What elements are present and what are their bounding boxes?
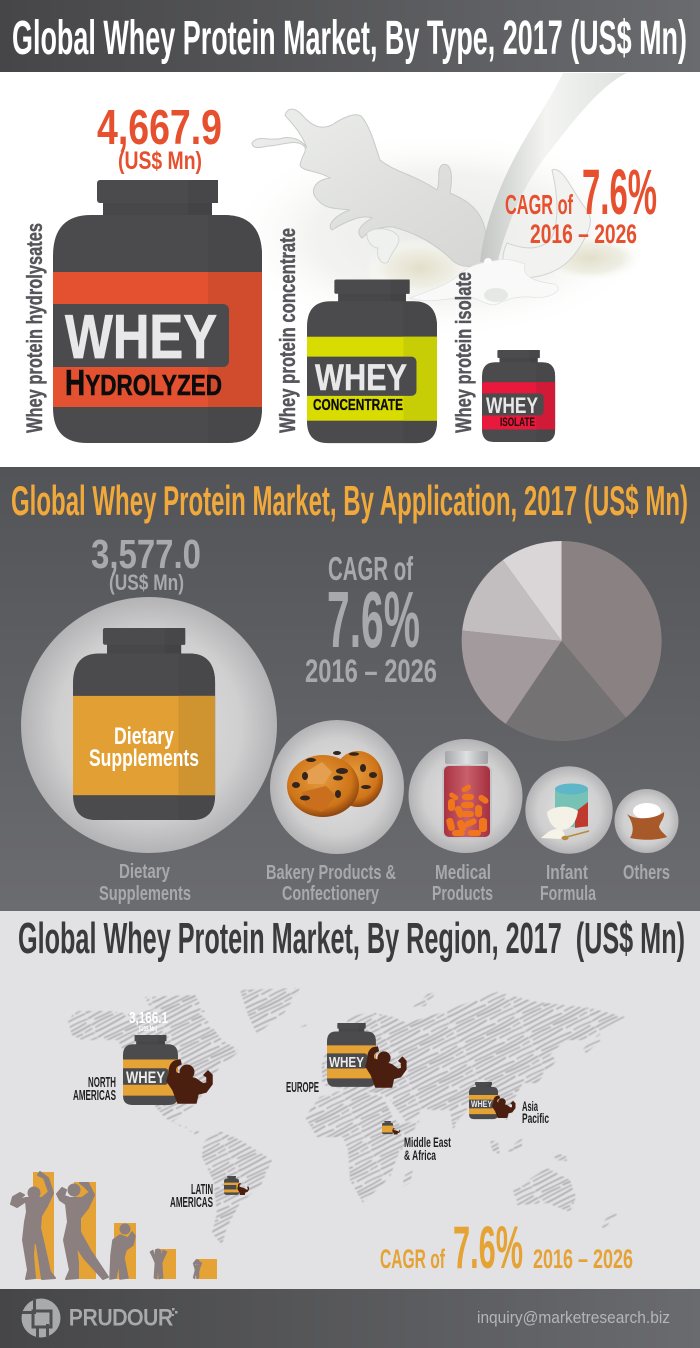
label: medical: Medical xyxy=(435,862,491,884)
panel: region section xyxy=(0,911,700,1289)
label: north americas: NORTH xyxy=(88,1074,116,1091)
callout: CAGR application: 7.6% xyxy=(327,575,420,664)
label: bakery xyxy=(266,862,396,905)
label: dietary supplements xyxy=(99,861,191,905)
value: north america: 3,166.1 xyxy=(129,1010,168,1027)
jar: concentrate xyxy=(302,280,437,443)
jar: hydrolyzed xyxy=(45,180,262,443)
jar: hydrolyzed: HYDROLYZED xyxy=(65,362,222,403)
bubble: bakery cookies xyxy=(270,720,404,854)
figure: north america jar: WHEY xyxy=(126,1068,166,1087)
callout: CAGR region: 7.6% xyxy=(453,1214,523,1281)
callout: CAGR type xyxy=(505,156,657,249)
bar chart with bodybuilders xyxy=(11,1172,217,1279)
label: middle east africa: & Africa xyxy=(404,1147,436,1163)
callout: CAGR region xyxy=(380,1214,633,1281)
callout: CAGR application xyxy=(305,550,437,689)
label: latin americas xyxy=(170,1181,213,1211)
jar: hydrolyzed: WHEY xyxy=(65,303,217,372)
vertical label: hydrolysates: Whey protein hydrolysates xyxy=(22,223,47,433)
jar: concentrate: CONCENTRATE xyxy=(313,397,403,414)
figure: middle east jar xyxy=(382,1121,400,1134)
callout: CAGR application: 2016 – 2026 xyxy=(305,653,437,689)
callout: CAGR type: CAGR of xyxy=(505,189,573,220)
label: asia pacific: Asia xyxy=(522,1098,538,1114)
figure: latin america jar xyxy=(223,1176,249,1195)
world map xyxy=(68,988,625,1245)
label: infant formula: Formula xyxy=(540,883,597,905)
callout: CAGR type: 2016 – 2026 xyxy=(530,219,637,249)
logo wordmark: PRUDOUR xyxy=(69,1305,173,1330)
value: application: 3,577.0 xyxy=(91,531,201,577)
bubble: medical jar xyxy=(408,739,522,853)
figure: asia pacific jar xyxy=(468,1082,515,1119)
jar: isolate: WHEY xyxy=(486,393,538,418)
vertical label: concentrate: Whey protein concentrate xyxy=(275,228,300,433)
figure: asia pacific jar: WHEY xyxy=(471,1099,492,1109)
callout: CAGR region: 2016 – 2026 xyxy=(533,1244,633,1274)
bubble: dietary supplements jar xyxy=(21,597,277,853)
value: type xyxy=(97,101,222,175)
footer bar xyxy=(0,1289,700,1348)
label: infant formula: Infant xyxy=(546,862,588,884)
contact email: inquiry@marketresearch.biz xyxy=(477,1308,670,1327)
jar: concentrate: WHEY xyxy=(315,357,407,398)
callout: CAGR region: CAGR of xyxy=(380,1244,446,1274)
label: north americas xyxy=(73,1074,116,1104)
label: infant formula xyxy=(540,862,597,905)
bubble: dietary supplements jar: Supplements xyxy=(89,745,199,772)
label: europe: EUROPE xyxy=(286,1079,319,1096)
label: latin americas: AMERICAS xyxy=(170,1194,213,1211)
milk splash illustration xyxy=(225,73,655,340)
value: application: (US$ Mn) xyxy=(109,570,184,595)
label: bakery: Bakery Products & xyxy=(266,862,396,884)
label: medical xyxy=(432,862,493,905)
label: middle east africa xyxy=(404,1134,451,1163)
value: north america xyxy=(129,1010,168,1033)
figure: europe jar xyxy=(325,1023,406,1087)
label: dietary supplements: Supplements xyxy=(99,883,191,905)
pie chart xyxy=(462,541,662,741)
jar: isolate xyxy=(479,350,555,442)
value: type: (US$ Mn) xyxy=(118,147,202,175)
callout: CAGR application: CAGR of xyxy=(328,550,414,587)
figure: europe jar: WHEY xyxy=(329,1054,364,1071)
label: others: Others xyxy=(623,862,670,884)
bubble: dietary supplements jar: Dietary xyxy=(114,723,174,750)
header bar: type xyxy=(0,0,700,72)
label: medical: Products xyxy=(432,883,493,905)
label: middle east africa: Middle East xyxy=(404,1134,451,1150)
label: bakery: Confectionery xyxy=(282,883,380,905)
label: dietary supplements: Dietary xyxy=(119,861,171,883)
icon: Prudour logo xyxy=(22,1298,60,1338)
label: north americas: AMERICAS xyxy=(73,1087,116,1104)
label: latin americas: LATIN xyxy=(191,1181,213,1198)
panel: application section xyxy=(0,467,700,911)
bubble: infant formula xyxy=(525,766,613,854)
value: application xyxy=(91,531,201,595)
vertical label: isolate: Whey protein isolate xyxy=(451,272,476,433)
bubble: others sack xyxy=(614,789,678,853)
label: asia pacific xyxy=(522,1098,549,1126)
value: type: 4,667.9 xyxy=(97,101,222,155)
panel: type section xyxy=(0,0,700,467)
figure: north america jar xyxy=(121,1035,212,1105)
jar: isolate: ISOLATE xyxy=(500,417,535,429)
value: north america: (US$ Mn) xyxy=(139,1026,157,1033)
label: asia pacific: Pacific xyxy=(522,1110,549,1126)
